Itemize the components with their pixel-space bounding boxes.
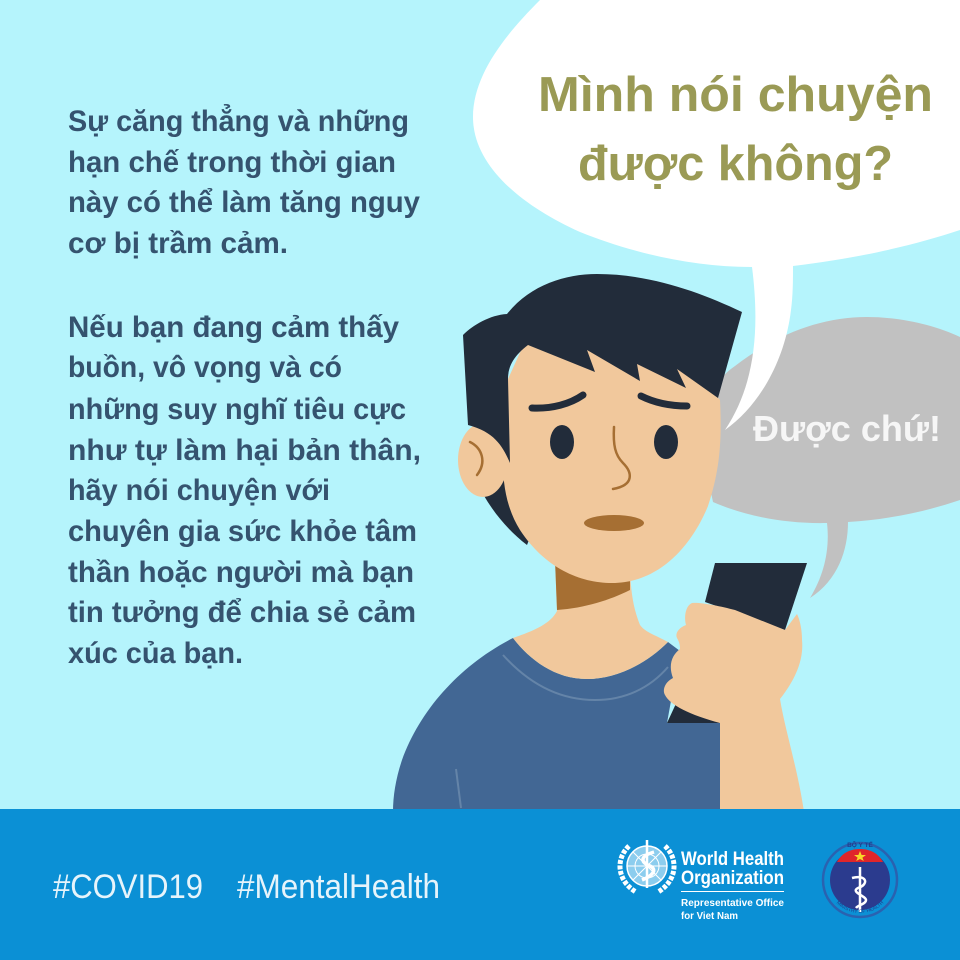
lower hair — [483, 478, 545, 545]
text block: second paragraph: hãy nói chuyện với — [68, 474, 330, 507]
text block: second paragraph: chuyên gia sức khỏe tâm — [68, 515, 417, 548]
neck — [513, 560, 668, 679]
globe — [627, 846, 667, 886]
speech bubble: white question — [473, 0, 960, 430]
text block: second paragraph: thần hoặc người mà bạn — [68, 556, 414, 589]
reply text: Được chứ! — [753, 408, 941, 449]
logo text: WHO: World Health — [681, 849, 784, 870]
hashtags: #COVID19 — [53, 868, 203, 906]
logo text: WHO — [681, 849, 784, 922]
logo text: WHO: Representative Office — [681, 897, 784, 909]
text block: second paragraph: như tự làm hại bản thân, — [68, 434, 421, 467]
eyes — [550, 425, 678, 459]
face — [503, 335, 721, 583]
heading: question: Mình nói chuyện — [538, 68, 933, 122]
neck shadow — [555, 560, 630, 610]
navy disc — [830, 850, 890, 910]
text block: second paragraph — [68, 311, 421, 670]
red banner — [837, 849, 883, 862]
phone screen — [705, 563, 807, 630]
ear inner line — [470, 442, 482, 475]
eyebrows — [532, 395, 687, 408]
shirt — [393, 638, 720, 812]
logo: Ministry of Health: MINISTRY OF HEALTH — [836, 901, 884, 913]
mouth — [584, 515, 644, 531]
text block: first paragraph — [68, 104, 420, 260]
staff and serpent — [852, 867, 866, 912]
text block: second paragraph: tin tưởng để chia sẻ cảm — [68, 596, 416, 629]
logo: WHO emblem — [620, 840, 674, 892]
logo text: WHO: for Viet Nam — [681, 910, 738, 922]
hair — [463, 274, 742, 463]
text block: first paragraph: hạn chế trong thời gian — [68, 146, 396, 179]
footer band — [0, 809, 960, 960]
text block: second paragraph: buồn, vô vọng và có — [68, 351, 342, 384]
ring captions: BỘ Y TẾ — [847, 839, 874, 849]
text block: first paragraph: cơ bị trầm cảm. — [68, 227, 288, 260]
phone lower edge behind hand — [667, 695, 720, 723]
logo: Ministry of Health — [822, 839, 898, 918]
text block: second paragraph: xúc của bạn. — [68, 637, 243, 670]
laurel left — [620, 846, 636, 892]
ear — [458, 423, 508, 497]
text block: first paragraph: này có thể làm tăng nguy — [68, 186, 420, 219]
logo text: WHO: Organization — [681, 868, 784, 889]
nose — [613, 427, 630, 489]
heading: question — [538, 68, 933, 191]
heading: question: được không? — [578, 137, 893, 191]
text block: second paragraph: những suy nghĩ tiêu cực — [68, 393, 406, 426]
hashtags: #MentalHealth — [237, 868, 440, 906]
speech bubble: grey reply — [700, 317, 960, 598]
outer ring — [823, 843, 897, 917]
star — [854, 851, 866, 861]
text block: second paragraph: Nếu bạn đang cảm thấy — [68, 311, 399, 344]
text block: first paragraph: Sự căng thẳng và những — [68, 104, 409, 138]
laurel right — [658, 846, 674, 892]
shirt collar seam — [503, 655, 668, 700]
shirt sleeve seam — [456, 769, 461, 808]
hashtags — [53, 868, 440, 906]
staff and serpent — [646, 840, 648, 888]
hand and arm — [664, 603, 804, 812]
character: worried man with phone — [393, 274, 807, 812]
